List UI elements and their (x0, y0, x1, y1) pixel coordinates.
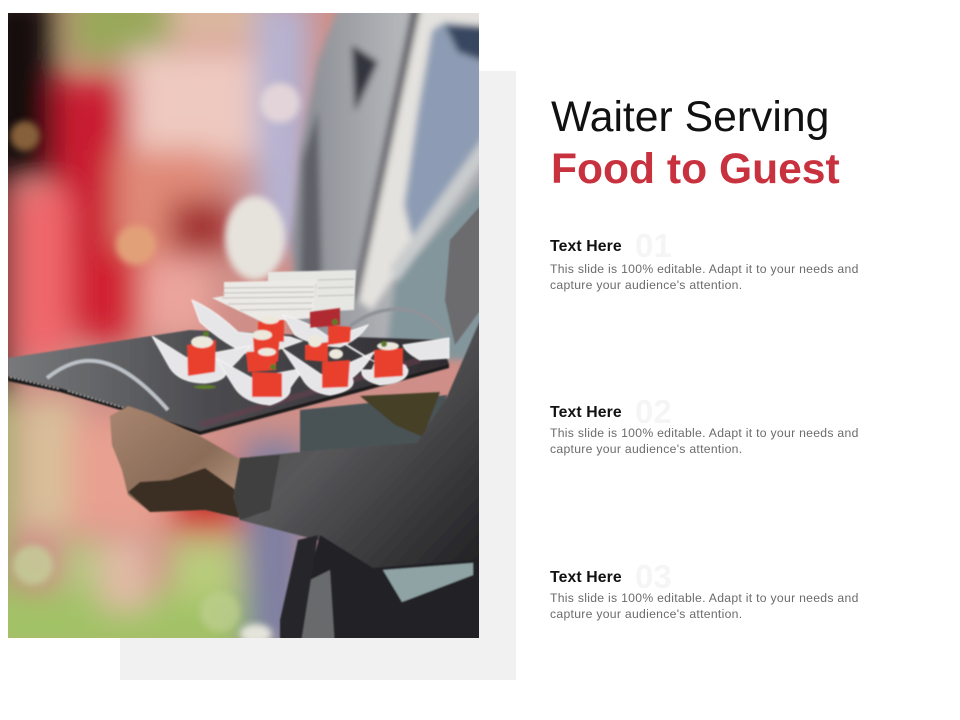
text block 1: This slide is 100% editable. Adapt it to your needs and (550, 262, 859, 276)
waiter jacket and shirt (292, 0, 510, 360)
heading 1: Text Here (550, 238, 622, 255)
number 01: 01 (635, 227, 672, 264)
text block 2: This slide is 100% editable. Adapt it to your needs and (550, 426, 859, 440)
number 02: 02 (635, 393, 672, 430)
number 03: 03 (635, 558, 672, 595)
text block 3 (550, 591, 859, 621)
title (551, 93, 840, 193)
text block 2 (550, 426, 859, 456)
heading 2: Text Here (550, 404, 622, 421)
spoons with food (152, 300, 449, 405)
title line 2: Food to Guest (551, 145, 840, 193)
waiter sleeve and torso (233, 195, 490, 650)
blurred background (0, 0, 310, 660)
grey backing panel (120, 71, 516, 680)
text block 2: capture your audience's attention. (550, 442, 742, 456)
text block 1 (550, 262, 859, 292)
slate tray (8, 330, 449, 435)
text block 3: capture your audience's attention. (550, 607, 742, 621)
photo: waiter holding slate tray of food (8, 13, 479, 638)
waiter hand (110, 406, 252, 518)
text block 1: capture your audience's attention. (550, 278, 742, 292)
stacked white plates (212, 270, 356, 322)
text block 3: This slide is 100% editable. Adapt it to your needs and (550, 591, 859, 605)
heading 3: Text Here (550, 569, 622, 586)
title line 1: Waiter Serving (551, 93, 829, 141)
tray handles (47, 309, 446, 410)
